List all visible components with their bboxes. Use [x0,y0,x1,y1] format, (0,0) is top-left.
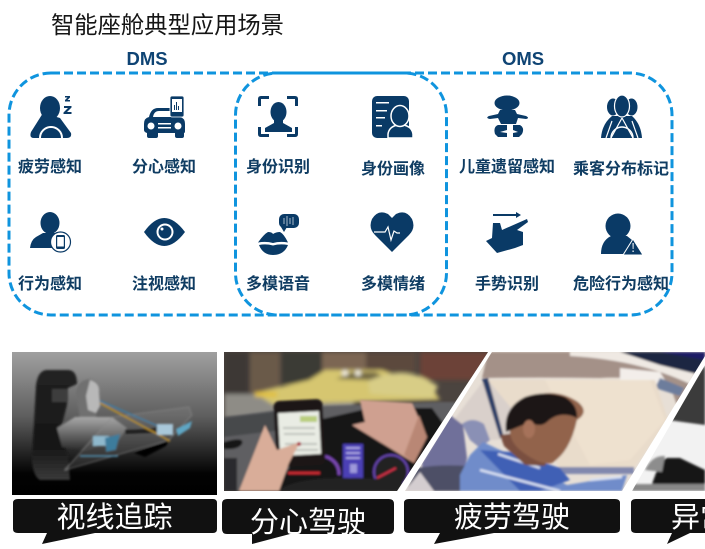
item: child left behind sensing [459,96,555,176]
icon: pointing hand with arrow [486,212,528,253]
item: distraction sensing [132,96,196,176]
icon: eye [144,218,185,246]
callout: abnormal driving [631,499,705,544]
title: 智能座舱典型应用场景 [51,12,284,38]
item: identity profile [361,96,425,178]
label: 多模情绪 [361,274,425,293]
label: 注视感知 [132,274,196,293]
item: gesture recognition [475,212,539,293]
label: 手势识别 [475,274,539,293]
item: multimodal emotion [361,212,425,293]
photo: driver texting [224,352,500,491]
photo: fatigued driver [405,352,705,491]
photo: gaze tracking driver [12,352,217,495]
icon: three passengers [601,95,642,138]
label: 身份识别 [246,158,310,176]
item: behaviour sensing [18,212,82,293]
photo: abnormal driving [630,365,705,491]
label: 分心感知 [132,157,196,176]
callout: distracted driving [222,499,394,544]
heading: DMS: DMS [126,48,168,69]
label: 乘客分布标记 [573,159,669,178]
heading: OMS: OMS [502,48,544,69]
item: dangerous behaviour sensing [573,214,669,293]
icon: person with phone [30,212,70,252]
label: 行为感知 [18,274,82,293]
icon: face scan [258,96,298,137]
icon: profile card [372,96,413,138]
icon: car with phone [144,96,185,138]
item: passenger distribution marking [573,95,669,178]
icon: heart with pulse [371,212,413,252]
item: gaze sensing [132,218,196,293]
callout: fatigued driving [404,499,620,544]
callout: distracted driving: 分心驾驶 [250,506,366,539]
label: 儿童遗留感知 [459,157,555,176]
item: multimodal voice [246,214,310,293]
callout: gaze tracking: 视线追踪 [56,501,173,534]
label: 危险行为感知 [573,274,669,293]
label: 多模语音 [246,274,310,293]
icon: sleeping driver [30,96,71,138]
callout: fatigued driving: 疲劳驾驶 [454,501,570,534]
icon: lips and speech bubble [258,214,299,255]
item: fatigue sensing [18,96,82,176]
label: 身份画像 [361,159,425,178]
icon: baby [487,96,528,137]
dashed frame: shared centre range [236,73,446,315]
item: identity recognition [246,96,310,176]
dashed frame: outer DMS and OMS range [9,73,672,315]
icon: person with warning triangle [601,214,643,255]
label: 疲劳感知 [18,157,82,176]
callout: gaze tracking [13,499,217,544]
